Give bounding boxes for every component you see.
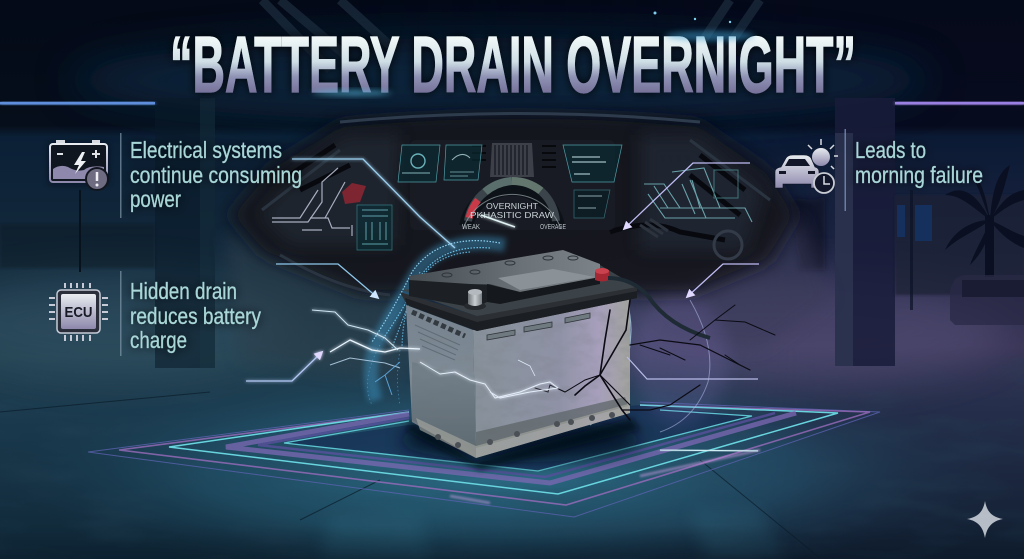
lid lower band	[400, 286, 637, 331]
gauge: overnight parasitic draw: WEAK	[462, 224, 480, 231]
battery cable	[608, 278, 710, 338]
neon line: left	[0, 102, 155, 104]
gauge: overnight parasitic draw	[462, 181, 566, 231]
circuit overlay left	[272, 168, 352, 236]
left pillar	[155, 98, 215, 368]
arrow: top left callout	[292, 159, 455, 248]
arrow: lower left callout	[246, 352, 322, 381]
gauge: overnight parasitic draw: PKHASITIC DRAW	[470, 210, 554, 220]
text: leads to morning failure	[855, 137, 983, 188]
lid top	[409, 250, 600, 292]
red fuse box	[342, 183, 366, 204]
palm tree	[945, 165, 1024, 277]
gauge: overnight parasitic draw: OVERAGE	[540, 224, 566, 231]
text: hidden drain reduces battery charge: reduces battery	[130, 303, 261, 329]
dome: right energy field	[575, 265, 728, 432]
text: electrical systems continue consuming power: power	[130, 186, 181, 212]
icon: ECU chip: ECU	[64, 304, 92, 321]
background fence and building	[0, 224, 155, 268]
cracks	[535, 300, 775, 420]
HUD panels centre	[398, 145, 622, 218]
right pillar	[835, 98, 895, 366]
icon: car, sun and clock	[775, 139, 838, 193]
engine bay	[225, 114, 830, 380]
text: electrical systems continue consuming power	[130, 137, 302, 212]
arrow: lower right callout	[627, 357, 758, 379]
gauge: overnight parasitic draw: OVERNIGHT	[486, 201, 538, 211]
text: hidden drain reduces battery charge: charge	[130, 327, 187, 353]
right face	[473, 297, 630, 458]
text: hidden drain reduces battery charge: Hidden drain	[130, 278, 237, 304]
icon: sparkle watermark	[967, 501, 1003, 538]
floor haze glow	[0, 340, 1000, 559]
car battery	[400, 250, 640, 470]
divider	[120, 133, 122, 218]
floor seams	[0, 392, 820, 558]
lid deck	[402, 265, 637, 316]
grime texture	[406, 297, 630, 458]
fender haze	[225, 235, 400, 380]
callout: morning failure	[775, 129, 983, 211]
circuit overlay right	[644, 168, 752, 222]
mesh: left energy field	[368, 241, 505, 405]
left face	[406, 305, 476, 458]
divider	[844, 129, 846, 211]
arrow: top right callout	[624, 163, 750, 229]
text: leads to morning failure: Leads to	[855, 137, 926, 163]
lightning arcs	[312, 310, 558, 398]
text: electrical systems continue consuming power: Electrical systems	[130, 137, 282, 163]
callout: electrical systems	[49, 133, 302, 218]
ceiling beams	[262, 0, 760, 70]
engine cover	[410, 140, 615, 230]
title band haze	[70, 38, 930, 122]
text: hidden drain reduces battery charge	[130, 278, 261, 353]
positive terminal	[595, 271, 609, 282]
parked car	[950, 275, 1024, 325]
icon: battery warning	[49, 140, 108, 190]
icon: ECU chip	[49, 283, 108, 341]
arrow: middle right callout	[687, 264, 759, 297]
title flare	[312, 12, 755, 96]
text: electrical systems continue consuming power: continue consuming	[130, 162, 302, 188]
HUD panel left	[357, 205, 392, 250]
arrow: middle left callout	[276, 264, 378, 298]
divider	[120, 271, 122, 356]
floor rings: concentric neon diamond	[88, 402, 880, 517]
floor reflections	[320, 510, 785, 559]
negative terminal	[464, 302, 486, 310]
callout: hidden drain	[49, 271, 261, 356]
text: leads to morning failure: morning failure	[855, 162, 983, 188]
neon line: right	[895, 102, 1024, 104]
shadow	[405, 418, 640, 470]
bottom vignette	[0, 525, 1024, 559]
